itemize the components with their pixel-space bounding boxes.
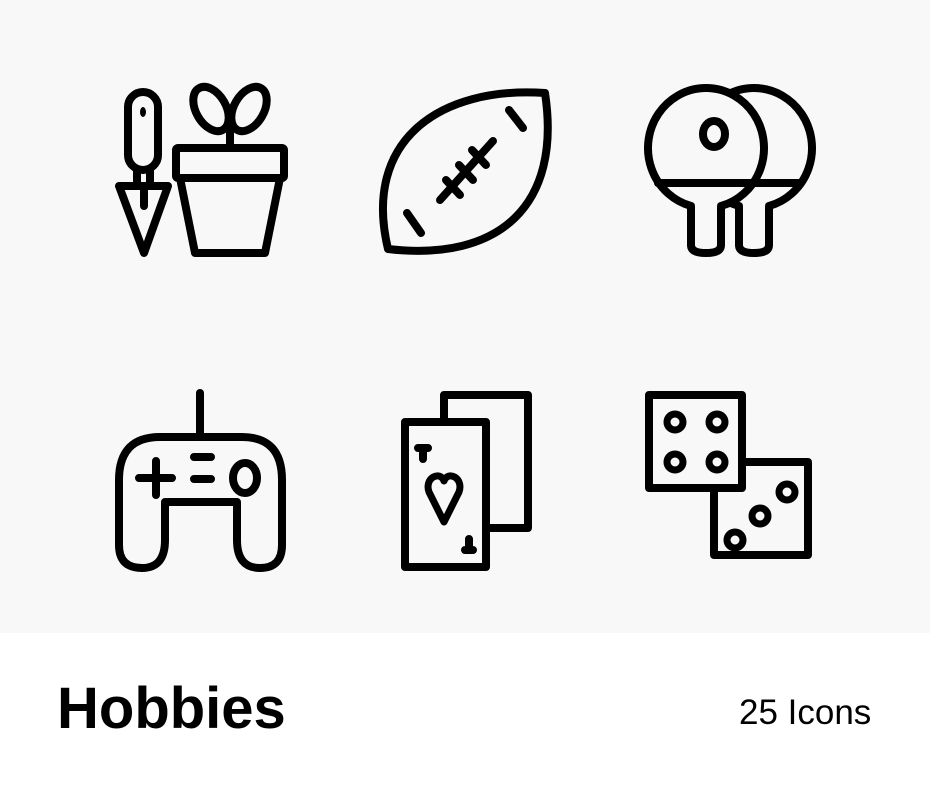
icon: playing cards	[405, 395, 528, 567]
icon: gardening trowel and plant pot	[119, 81, 284, 253]
icon: american football	[383, 92, 548, 251]
icon: ping pong paddles	[648, 88, 812, 253]
icon count: 25 Icons	[739, 693, 871, 732]
title: Hobbies	[57, 676, 286, 741]
icon: dice	[649, 395, 808, 555]
icon: game controller	[119, 393, 282, 568]
